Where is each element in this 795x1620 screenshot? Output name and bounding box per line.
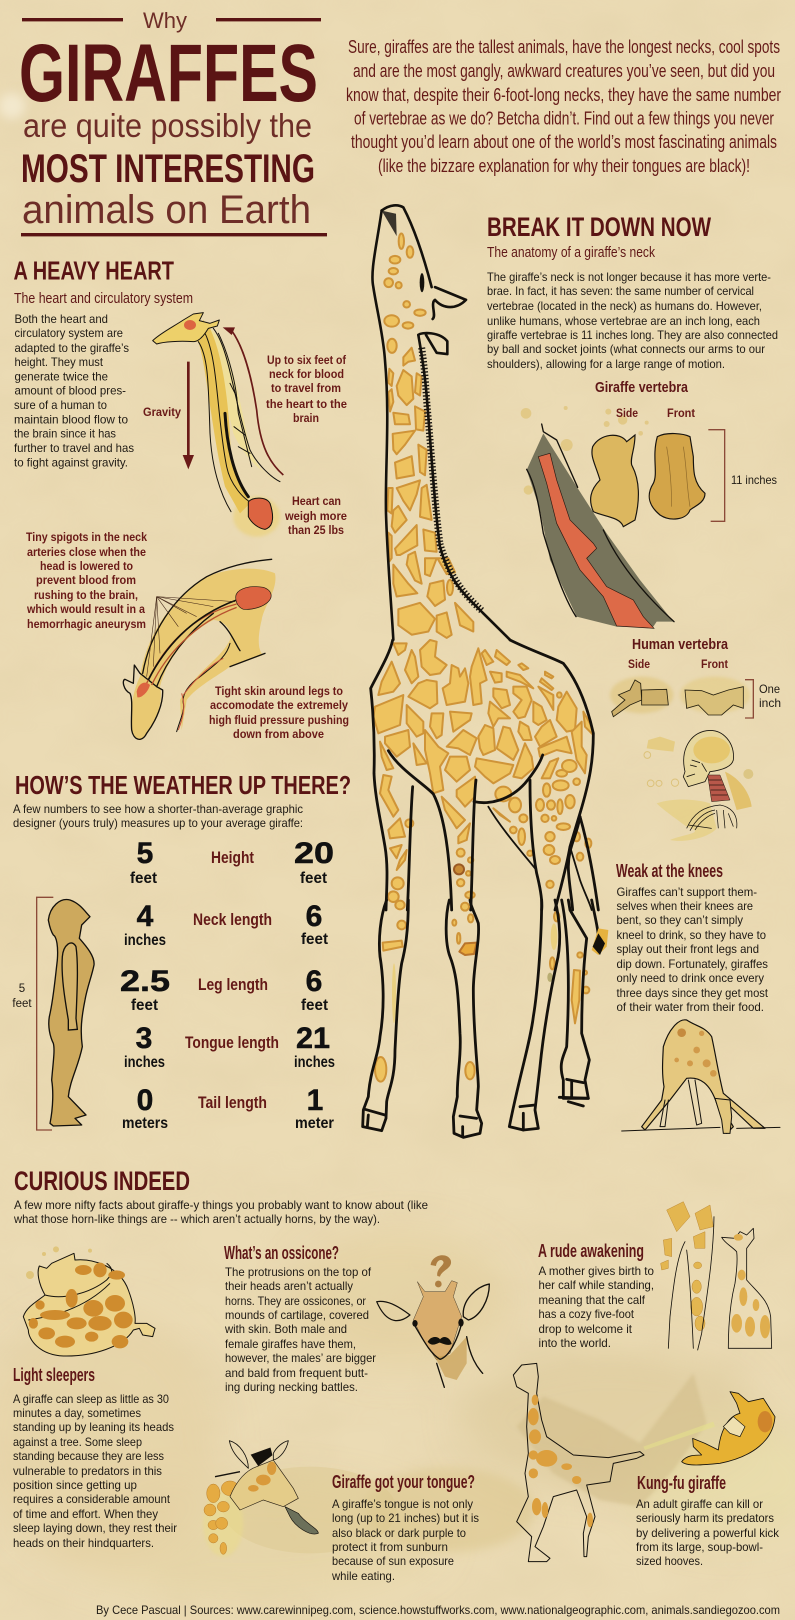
text block: rude awakening body: meaning that the calf xyxy=(538,1294,646,1307)
label: gravity: Gravity xyxy=(143,407,182,419)
neck wash xyxy=(190,320,250,513)
giraffe head and neck xyxy=(372,205,510,640)
paint drops xyxy=(521,406,649,495)
text block: light sleepers body: standing because they are less xyxy=(13,1450,164,1463)
text block: neck body xyxy=(487,271,778,371)
row: height: feet xyxy=(300,870,328,887)
labels: human vertebra views: Front xyxy=(701,659,728,671)
section heading: Break it down now xyxy=(487,212,711,261)
annotation: tiny spigots: head is lowered to xyxy=(40,561,133,573)
text block: weak at the knees body: bent, so they can’t simply xyxy=(616,914,743,927)
text block: kung-fu body: An adult giraffe can kill or xyxy=(636,1498,763,1511)
diagram: standing giraffe circulatory system xyxy=(153,313,283,537)
section heading: Weak at the knees: Weak at the knees xyxy=(616,861,723,881)
row: leg length: 2.5 xyxy=(120,965,170,998)
head xyxy=(153,313,219,344)
row: neck length: 4 xyxy=(137,900,154,933)
text block: weak at the knees body xyxy=(616,886,769,1014)
text block: tongue body: while eating. xyxy=(331,1570,395,1583)
neck spots xyxy=(204,1481,239,1554)
brain xyxy=(137,683,150,697)
text block: weak at the knees body: kneel to drink, so they have to xyxy=(616,929,766,942)
text block: weak at the knees body: Giraffes can’t support them- xyxy=(616,886,757,899)
row: tongue length: 3 xyxy=(136,1022,152,1055)
annotation: tight skin: accomodate the extremely xyxy=(210,700,349,712)
row: tongue length: 21 xyxy=(296,1022,330,1055)
text block: weather intro: A few numbers to see how a shorter-than-average graphic xyxy=(13,802,303,816)
text block: kung-fu body: from its large, soup-bowl- xyxy=(636,1541,763,1554)
row: neck length xyxy=(124,900,329,949)
text block: ossicone body: The protrusions on the top of xyxy=(225,1266,372,1279)
text block: neck body: unlike humans, whose vertebrae are an inch long, each xyxy=(487,315,760,328)
mother spots xyxy=(661,1202,713,1331)
illustration: sleeping giraffe xyxy=(23,1246,155,1356)
spigot pointer lines xyxy=(147,597,235,677)
text block: heart body: amount of blood pres- xyxy=(14,384,126,398)
text block: tongue body: A giraffe’s tongue is not only xyxy=(332,1498,473,1511)
text block: weak at the knees body: selves when their knees are xyxy=(616,900,753,913)
brain xyxy=(184,320,196,330)
row: tail length: Tail length xyxy=(198,1093,267,1112)
row: tongue length: Tongue length xyxy=(185,1033,279,1052)
section heading: Curious indeed: CURIOUS INDEED xyxy=(14,1166,190,1196)
text block: light sleepers body: requires a considerable amount xyxy=(13,1493,171,1506)
text block: tongue body xyxy=(331,1498,479,1583)
text block: heart body: circulatory system are xyxy=(14,327,123,340)
annotation: tight skin: high fluid pressure pushing xyxy=(209,715,349,727)
row: tail length xyxy=(122,1084,334,1132)
skull xyxy=(683,730,733,787)
mother legs xyxy=(668,1217,714,1350)
text block: light sleepers body: sleep laying down, they rest their xyxy=(13,1522,177,1535)
ears xyxy=(229,1441,248,1468)
annotation: heart weight: Heart can xyxy=(292,496,341,508)
heading: Light sleepers: Light sleepers xyxy=(13,1365,95,1385)
annotation: tiny spigots: rushing to the brain, xyxy=(34,590,138,602)
subheading: anatomy of neck: The anatomy of a giraffe’s neck xyxy=(487,244,655,261)
vertebra front xyxy=(649,434,705,519)
heart xyxy=(248,498,273,529)
illustration: tongue giraffe xyxy=(203,1441,397,1557)
row: height xyxy=(130,837,334,887)
label: 5 feet xyxy=(12,983,32,1010)
text block: rude awakening body: A mother gives birth to xyxy=(538,1265,654,1278)
body ink outline xyxy=(371,640,598,910)
text block: tongue body: because of sun exposure xyxy=(332,1555,454,1568)
heading: Giraffe got your tongue: Giraffe got your tongue? xyxy=(332,1472,475,1492)
text block: light sleepers body xyxy=(13,1393,177,1550)
text block: tongue body: long (up to 21 inches) but it is xyxy=(332,1512,479,1525)
question mark icon xyxy=(431,1255,451,1277)
text block: neck body: shoulders), allowing for a large range of motion. xyxy=(487,358,725,371)
title rule left xyxy=(22,18,123,21)
person silhouette xyxy=(48,900,94,1126)
annotation: tiny spigots: arteries close when the xyxy=(27,547,146,559)
text block: light sleepers body: standing up by leaning its heads xyxy=(13,1421,174,1434)
stains xyxy=(647,737,675,752)
row: leg length: Leg length xyxy=(198,975,268,994)
illustration: drinking giraffe xyxy=(622,1020,780,1133)
row: neck length: Neck length xyxy=(193,910,272,929)
text block: weak at the knees body: three days since they get most xyxy=(616,987,769,1000)
annotation: tiny spigots: Tiny spigots in the neck xyxy=(26,532,148,544)
text block: heart body: maintain blood flow to xyxy=(14,413,128,426)
spine xyxy=(708,775,730,802)
intro text block xyxy=(346,37,781,176)
text block: ossicone body: female giraffes have them, xyxy=(225,1338,356,1351)
neck cross-section xyxy=(527,433,673,627)
annotation: six feet of neck: Up to six feet of xyxy=(267,355,346,367)
annotation: six feet of neck: brain xyxy=(293,413,319,425)
row: tongue length xyxy=(124,1022,335,1071)
text block: weather intro xyxy=(13,802,303,830)
wash xyxy=(610,677,673,713)
giraffe body xyxy=(371,640,598,910)
annotation: tiny spigots xyxy=(26,532,148,631)
arteries xyxy=(147,604,237,685)
label: 5 feet: feet xyxy=(12,998,32,1010)
text block: light sleepers body: minutes a day, sometimes xyxy=(13,1407,141,1420)
text block: neck body: brae. In fact, it has seven: the same number of cervical xyxy=(487,285,754,298)
text block: rude awakening body xyxy=(538,1265,654,1350)
row: leg length: feet xyxy=(131,997,159,1014)
body spots xyxy=(373,640,593,909)
diagram: giraffe vertebrae xyxy=(521,406,725,628)
text block: tongue body: protect it from sunburn xyxy=(332,1541,448,1554)
comparison table xyxy=(120,837,335,1132)
row: tail length: meters xyxy=(122,1115,168,1132)
annotation: tight skin: Tight skin around legs to xyxy=(215,686,343,698)
label: 5 feet: 5 xyxy=(19,983,25,995)
text block: heart body: adapted to the giraffe’s xyxy=(14,342,129,355)
text block: heart body: further to travel and has xyxy=(14,442,134,455)
annotation: six feet of neck: neck for blood xyxy=(269,369,344,381)
text block: heart body xyxy=(14,313,134,470)
heading: What's an ossicone: What’s an ossicone? xyxy=(224,1243,339,1263)
lion xyxy=(682,1392,775,1465)
row: leg length: feet xyxy=(301,997,329,1014)
labels: giraffe vertebra views: Side xyxy=(616,408,638,420)
text block: light sleepers body: A giraffe can sleep as little as 30 xyxy=(13,1393,169,1406)
ribs xyxy=(687,805,737,831)
kung-fu stain xyxy=(517,1373,707,1507)
title line: animals on Earth: animals on Earth xyxy=(22,188,311,232)
vertebra side xyxy=(591,435,638,527)
text block: light sleepers body: against a tree. Some sleep xyxy=(13,1436,142,1449)
vertebra front xyxy=(685,687,743,715)
label: one inch xyxy=(759,682,781,710)
text block: rude awakening body: drop to welcome it xyxy=(538,1323,633,1336)
annotation: heart weight: weigh more xyxy=(284,511,347,523)
heading: A rude awakening: A rude awakening xyxy=(538,1241,644,1261)
text block: weak at the knees body: of their water from their food. xyxy=(616,1001,764,1014)
text block: weak at the knees body: only need to drink once every xyxy=(616,972,764,985)
text block: ossicone body: and bald from frequent butt- xyxy=(225,1367,368,1380)
heading: giraffe vertebra: Giraffe vertebra xyxy=(595,379,689,396)
title rule right xyxy=(216,18,321,21)
text block: ossicone body: ing during necking battles. xyxy=(225,1381,358,1394)
arrow: blood travel to brain xyxy=(232,331,283,475)
face xyxy=(413,1281,462,1360)
labels: giraffe vertebra views: Front xyxy=(667,408,695,420)
cervical vertebrae xyxy=(538,453,654,628)
main giraffe illustration xyxy=(363,205,608,1137)
diagram: lowered giraffe circulatory system xyxy=(123,559,275,739)
heading: Kung-fu giraffe: Kung-fu giraffe xyxy=(637,1473,726,1493)
text block: weak at the knees body: splay out their front legs and xyxy=(616,943,759,956)
title word: Why: Why xyxy=(143,8,187,33)
body wash xyxy=(131,569,275,739)
annotation: heart weight: than 25 lbs xyxy=(288,525,344,537)
annotation: six feet of neck: the heart to the xyxy=(266,399,347,411)
section heading: A heavy heart xyxy=(14,256,193,307)
text block: light sleepers body: vulnerable to predators in this xyxy=(13,1465,162,1478)
text block: kung-fu body: sized hooves. xyxy=(636,1555,703,1568)
text block: ossicone body: their heads aren’t actually xyxy=(225,1280,353,1293)
row: neck length: feet xyxy=(301,931,329,948)
ink xyxy=(413,1323,483,1387)
annotation: heart weight xyxy=(284,496,347,537)
text block: curious indeed intro: A few more nifty facts about giraffe-y things you probably want to know about (like xyxy=(14,1198,428,1212)
text block: kung-fu body: by delivering a powerful kick xyxy=(636,1527,779,1540)
row: tail length: 1 xyxy=(307,1084,323,1117)
size bracket one inch xyxy=(745,680,753,718)
text block: curious indeed intro: what those horn-like things are -- which aren’t actually horns, by the way). xyxy=(13,1212,380,1226)
text block: weather intro: designer (yours truly) measures up to your average giraffe: xyxy=(13,816,303,830)
text block: heart body: generate twice the xyxy=(14,371,108,384)
title word: GIRAFFES: GIRAFFES xyxy=(19,28,318,119)
text block: rude awakening body: her calf while standing, xyxy=(538,1279,654,1292)
heading: human vertebra: Human vertebra xyxy=(632,636,729,653)
labels: giraffe vertebra views xyxy=(616,408,695,420)
diagram: human vertebrae xyxy=(610,677,753,718)
annotation: six feet of neck: to travel from xyxy=(271,383,341,395)
row: tongue length: inches xyxy=(124,1054,165,1071)
text block: heart body: height. They must xyxy=(14,356,104,369)
label: one inch: inch xyxy=(759,696,781,710)
text block: ossicone body: with skin. Both male and xyxy=(224,1323,347,1336)
row: tail length: 0 xyxy=(137,1084,153,1117)
title line: are quite possibly the: are quite possibly the xyxy=(23,107,312,144)
arrow: gravity xyxy=(184,362,192,458)
text block: heart body: to fight against gravity. xyxy=(14,457,128,470)
title rule bottom xyxy=(21,233,327,236)
annotation: six feet of neck xyxy=(266,355,347,425)
illustration: ossicone giraffe head xyxy=(377,1255,489,1387)
head xyxy=(230,1460,298,1510)
mane xyxy=(422,348,482,610)
text block: light sleepers body: of time and effort. When they xyxy=(13,1508,158,1521)
annotation: tiny spigots: which would result in a xyxy=(26,604,146,616)
title line: MOST INTERESTING: MOST INTERESTING xyxy=(21,147,315,191)
text block: curious indeed intro xyxy=(13,1198,428,1226)
row: tongue length: inches xyxy=(294,1054,335,1071)
labels: human vertebra views xyxy=(628,659,728,671)
neck lines xyxy=(198,328,280,512)
section heading: A heavy heart: A HEAVY HEART xyxy=(14,256,174,286)
title xyxy=(19,8,327,236)
text block: neck body: The giraffe’s neck is not longer because it has more verte- xyxy=(487,271,771,284)
subheading: heart and circulatory system: The heart and circulatory system xyxy=(14,290,193,307)
neck wash xyxy=(435,1337,467,1380)
row: height: 20 xyxy=(294,837,334,870)
head and neck ink outline xyxy=(372,205,510,640)
row: height: Height xyxy=(211,848,254,867)
text block: neck body: by ball and socket joints (what connects our arms to our xyxy=(487,343,765,356)
text block: tongue body: also black or dark purple to xyxy=(332,1527,466,1540)
mane tuft xyxy=(215,1448,272,1477)
right ear xyxy=(463,1284,489,1320)
ink lines xyxy=(123,559,272,739)
tail tuft xyxy=(592,928,608,955)
text block: ossicone body: mounds of cartilage, covered xyxy=(225,1309,369,1322)
giraffe legs xyxy=(363,900,608,1137)
text block: heart body: the brain since it has xyxy=(14,428,116,441)
moustache xyxy=(428,1337,452,1345)
text block: heart body: Both the heart and xyxy=(14,313,108,326)
giraffe xyxy=(513,1363,644,1562)
diagram: human figure with height bracket xyxy=(37,897,94,1130)
annotation: tiny spigots: prevent blood from xyxy=(36,575,136,587)
heart xyxy=(236,587,271,609)
section heading: Break it down now: BREAK IT DOWN NOW xyxy=(487,212,711,242)
height bracket xyxy=(37,897,53,1130)
leg ink outlines xyxy=(363,900,598,1137)
labels: human vertebra views: Side xyxy=(628,659,650,671)
illustration: kung-fu giraffe and lion xyxy=(513,1363,775,1562)
neck spots xyxy=(384,234,473,638)
label: 11 inches: 11 inches xyxy=(731,473,777,487)
text block: heart body: sure of a human to xyxy=(14,399,107,412)
row: leg length: 6 xyxy=(306,965,322,998)
text block: ossicone body xyxy=(224,1266,376,1394)
text block: weak at the knees body: dip down. Fortunately, giraffes xyxy=(616,958,768,971)
diagram: human skeleton head and neck xyxy=(644,730,753,841)
section heading: How's the weather up there: HOW’S THE WEATHER UP THERE? xyxy=(15,770,351,800)
row: tail length: meter xyxy=(295,1115,334,1132)
tongue xyxy=(285,1507,318,1534)
left ear xyxy=(377,1301,410,1321)
row: height: feet xyxy=(130,870,158,887)
row: neck length: 6 xyxy=(306,900,322,933)
text block: rude awakening body: has a cozy five-foot xyxy=(538,1308,635,1321)
size bracket 11 inches xyxy=(708,430,725,521)
row: leg length xyxy=(120,965,329,1014)
text block: light sleepers body: position since getting up xyxy=(13,1479,137,1492)
text block: ossicone body: however, the males’ are bigger xyxy=(225,1352,376,1365)
annotation: tight skin xyxy=(209,686,349,741)
kick beam xyxy=(643,1422,715,1450)
text block: neck body: vertebrae (located in the neck) as humans do. However, xyxy=(487,300,762,313)
vertebra side xyxy=(612,680,668,717)
main artery xyxy=(225,413,248,497)
calf xyxy=(722,1228,772,1348)
text block: light sleepers body: heads on their hindquarters. xyxy=(13,1537,154,1550)
illustration: mother and calf xyxy=(661,1202,772,1350)
text block: kung-fu body: seriously harm its predators xyxy=(636,1512,774,1525)
text block: rude awakening body: into the world. xyxy=(538,1337,611,1350)
text block: kung-fu body xyxy=(636,1498,779,1568)
leg spots xyxy=(375,901,589,1082)
annotation: tight skin: down from above xyxy=(233,729,324,741)
row: height: 5 xyxy=(137,837,153,870)
annotation: tiny spigots: hemorrhagic aneurysm xyxy=(27,619,146,631)
label: one inch: One xyxy=(759,682,780,696)
text block: neck body: giraffe vertebrae is 11 inches long. They are also connected xyxy=(487,329,778,342)
outer wash xyxy=(210,328,277,482)
row: neck length: inches xyxy=(124,932,166,949)
text block: ossicone body: horns. They are ossicones, or xyxy=(225,1295,366,1308)
